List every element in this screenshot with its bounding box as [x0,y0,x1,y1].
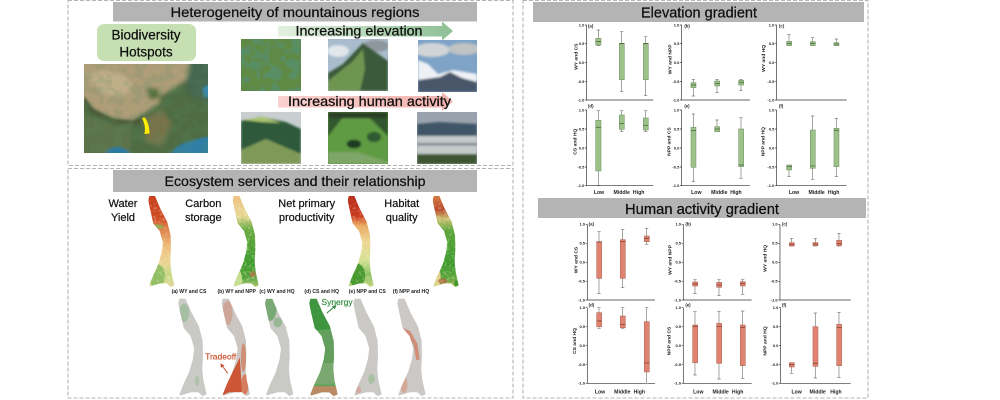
map: satellite view with study area [84,64,208,153]
map: net primary productivity [348,196,374,288]
map: NPP and HQ relationship: (f) NPP and HQ [393,289,429,295]
chart: elevation WY and HQ: 0.5 [769,41,775,46]
chart: elevation NPP and CS: 1.0 [674,107,680,112]
chart: human activity NPP and CS: 0.0 [675,343,682,348]
chart: elevation CS and HQ: High [633,190,644,196]
chart: elevation WY and HQ: WY and HQ [761,45,767,72]
label: habitat quality: quality [386,212,418,224]
chart: human activity CS and HQ: 0.0 [579,343,586,348]
chart: elevation NPP and HQ: High [828,190,839,196]
map: CS and HQ relationship: (d) CS and HQ [304,289,339,295]
chart: human activity CS and HQ: (d) [589,303,595,308]
chart: human activity NPP and CS: (e) [685,303,691,308]
chart: elevation CS and HQ [573,103,653,196]
chart: human activity WY and HQ: -0.5 [771,279,778,284]
chart: human activity NPP and CS: 1.0 [675,305,682,310]
label: carbon storage: storage [185,212,222,224]
chart: elevation CS and HQ: Low [594,190,605,196]
chart: elevation NPP and CS: -0.5 [672,164,680,169]
chart: human activity NPP and CS: -0.5 [674,362,682,367]
map: NPP and HQ relationship [393,289,429,396]
chart: elevation CS and HQ: 0.0 [579,145,585,150]
label: net primary productivity: productivity [279,212,335,224]
label: water yield: Water [109,198,137,210]
chart: elevation WY and CS: 0.5 [579,41,585,46]
chart: elevation CS and HQ: -1.0 [577,183,585,188]
chart: human activity CS and HQ: 0.5 [579,324,586,329]
chart: elevation WY and NPP: -1.0 [672,97,680,102]
chart: human activity NPP and HQ: Middle [809,389,826,395]
chart: elevation NPP and HQ: Middle [808,190,825,196]
chart: human activity CS and HQ: 1.0 [579,305,586,310]
map: WY and HQ relationship: (c) WY and HQ [259,289,295,295]
label: water yield: Yield [111,212,135,224]
callout: tradeoff: Tradeoff [205,352,237,362]
chart: human activity WY and HQ: (c) [782,221,788,226]
chart: elevation WY and HQ: (c) [779,24,785,29]
chart: elevation WY and NPP [668,22,750,102]
chart: human activity NPP and HQ [763,303,851,395]
map: WY and NPP relationship [217,289,256,396]
map: NPP and CS relationship: (e) NPP and CS [349,289,386,295]
chart: elevation NPP and CS: Low [691,190,702,196]
arrow: increasing human activity: Increasing human activity [288,93,451,109]
chart: elevation NPP and CS: NPP and CS [666,127,672,156]
chart: elevation NPP and CS: 0.0 [674,145,680,150]
chart: elevation WY and CS: -1.0 [577,97,585,102]
chart: human activity NPP and CS: Low [693,389,704,395]
chart: elevation WY and HQ: -0.5 [767,79,775,84]
chart: human activity NPP and HQ: Low [791,389,803,395]
callout: synergy: Synergy [321,297,353,307]
chart: human activity NPP and CS: -1.0 [674,381,682,386]
chart: elevation NPP and CS: 0.5 [674,126,680,131]
chart: elevation WY and HQ: -1.0 [767,97,775,102]
chart: human activity WY and CS: -0.5 [578,279,586,284]
heading: elevation gradient [533,2,864,22]
chart: elevation WY and NPP: 0.5 [674,41,680,46]
chart: human activity WY and CS: (a) [589,221,595,226]
map: carbon storage [233,196,259,289]
heading: human activity gradient [538,198,866,218]
icon: yellow study area [142,118,150,134]
chart: human activity NPP and CS: 0.5 [675,324,682,329]
chart: human activity CS and HQ: High [634,389,645,395]
chart: human activity WY and NPP: 0.0 [675,260,682,265]
chart: elevation NPP and CS: High [730,190,742,196]
map: WY and HQ relationship [259,289,295,396]
chart: human activity WY and NPP: -1.0 [674,297,682,302]
chart: elevation WY and CS: (a) [588,24,594,29]
chart: human activity WY and NPP: -0.5 [674,279,682,284]
chart: human activity WY and HQ [763,221,851,302]
map: WY and CS relationship: (a) WY and CS [172,289,207,295]
chart: elevation WY and CS: WY and CS [574,43,580,70]
chart: elevation WY and CS: 1.0 [579,22,585,27]
chart: elevation NPP and HQ: Low [789,190,800,196]
chart: elevation NPP and HQ [760,103,847,196]
chart: human activity CS and HQ: -0.5 [578,362,586,367]
chart: human activity NPP and HQ: 0.0 [773,343,779,348]
map: WY and CS relationship [172,289,207,396]
chart: elevation WY and NPP: WY and NPP [668,44,674,74]
chart: elevation NPP and HQ: -0.5 [767,164,775,169]
chart: elevation WY and NPP: (b) [684,24,690,29]
chart: human activity CS and HQ: Middle [614,389,631,395]
chart: elevation WY and HQ: 1.0 [769,22,775,27]
chart: elevation WY and CS [574,22,653,102]
chart: human activity WY and NPP: 0.5 [675,241,682,246]
map: WY and NPP relationship: (b) WY and NPP [217,289,256,295]
chart: elevation NPP and HQ: -1.0 [767,183,775,188]
chart: human activity CS and HQ: CS and HQ [572,328,578,354]
chart: elevation CS and HQ: Middle [613,190,630,196]
chart: human activity WY and CS: 1.0 [579,222,586,227]
chart: human activity NPP and CS: NPP and CS [666,326,672,355]
chart: human activity WY and CS: 0.5 [579,241,586,246]
chart: human activity NPP and HQ: -0.5 [771,362,779,367]
chart: human activity NPP and HQ: High [830,389,842,395]
chart: elevation NPP and HQ: 0.5 [769,126,775,131]
label: carbon storage: Carbon [185,198,221,210]
chart: human activity NPP and HQ: NPP and HQ [763,326,769,356]
label: net primary productivity: Net primary [278,198,335,210]
chart: elevation NPP and HQ: NPP and HQ [760,127,766,156]
chart: human activity WY and CS: 0.0 [579,260,586,265]
photo: middle human activity [328,112,388,164]
chart: elevation NPP and HQ: 1.0 [769,107,775,112]
chart: human activity NPP and HQ: 0.5 [773,324,779,329]
chart: human activity WY and NPP: (b) [685,221,691,226]
chart: human activity WY and NPP [668,221,752,302]
heading: ecosystem services: Ecosystem services and their relationship [164,173,426,189]
chart: human activity NPP and CS [666,303,752,395]
chart: elevation WY and NPP: -0.5 [672,79,680,84]
map: NPP and CS relationship [349,289,386,396]
map: habitat quality [433,196,459,288]
photo: low human activity [241,112,301,164]
chart group: elevation box plots [573,22,847,196]
chart: elevation NPP and HQ: 0.0 [769,145,775,150]
panel: elevation gradient and human activity gradient [523,0,868,398]
chart: human activity CS and HQ: -1.0 [578,381,586,386]
arrow: increasing elevation [278,22,453,40]
chart: human activity WY and CS: WY and CS [574,246,580,273]
chart: elevation CS and HQ: 1.0 [579,107,585,112]
heading: human activity gradient: Human activity gradient [625,202,779,218]
chart: elevation CS and HQ: (d) [588,103,594,108]
chart: elevation CS and HQ: -0.5 [577,164,585,169]
chart group: human activity box plots [572,221,851,395]
chart: human activity WY and NPP: WY and NPP [668,244,674,275]
chart: elevation NPP and HQ: (f) [779,103,784,108]
panel: ecosystem services and their relationship [68,168,513,398]
chart: human activity NPP and HQ: (f) [782,303,787,308]
chart: human activity WY and HQ: WY and HQ [763,245,769,272]
photo: middle elevation [328,39,388,91]
heading: heterogeneity [113,2,477,22]
photo: low elevation [241,39,301,91]
panel: heterogeneity of mountainous regions [68,0,513,166]
chart: human activity NPP and CS: Middle [712,389,729,395]
chart: elevation NPP and CS: -1.0 [672,183,680,188]
chart: elevation WY and CS: -0.5 [577,79,585,84]
callout: biodiversity hotspots: Biodiversity [111,28,181,42]
chart: human activity WY and CS [574,221,655,302]
chart: elevation NPP and CS [666,103,750,196]
photo: high human activity [417,112,477,164]
chart: elevation CS and HQ: 0.5 [579,126,585,131]
photo: high elevation [418,40,477,92]
chart: elevation NPP and CS: Middle [711,190,728,196]
chart: human activity WY and CS: -1.0 [578,297,586,302]
heading: heterogeneity: Heterogeneity of mountainous regions [170,4,420,20]
callout: biodiversity hotspots [97,24,196,61]
chart: elevation CS and HQ: CS and HQ [573,129,579,155]
chart: human activity NPP and HQ: -1.0 [771,381,779,386]
chart: elevation WY and CS: 0.0 [579,60,585,65]
chart: elevation WY and NPP: 0.0 [674,60,680,65]
chart: human activity WY and HQ: 0.5 [772,241,778,246]
chart: elevation WY and HQ [761,22,847,102]
chart: human activity WY and NPP: 1.0 [675,222,682,227]
chart: human activity WY and HQ: 0.0 [772,260,778,265]
map: water yield [148,196,175,288]
callout: biodiversity hotspots: Hotspots [119,44,173,60]
chart: human activity WY and HQ: -1.0 [771,297,778,302]
label: habitat quality: Habitat [384,198,419,210]
chart: human activity NPP and HQ: 1.0 [773,305,779,310]
chart: elevation NPP and CS: (e) [684,103,690,108]
arrow: increasing elevation: Increasing elevation [296,22,422,38]
chart: human activity NPP and CS: High [732,389,743,395]
chart: human activity WY and HQ: 1.0 [772,222,778,227]
heading: ecosystem services [113,170,477,192]
chart: elevation WY and NPP: 1.0 [674,22,680,27]
callout: tradeoff [205,352,237,373]
heading: elevation gradient: Elevation gradient [641,6,757,22]
chart: human activity CS and HQ [572,303,655,395]
map: CS and HQ relationship [304,289,339,397]
callout: synergy [321,297,353,313]
chart: elevation WY and HQ: 0.0 [769,60,775,65]
chart: human activity CS and HQ: Low [595,389,606,395]
